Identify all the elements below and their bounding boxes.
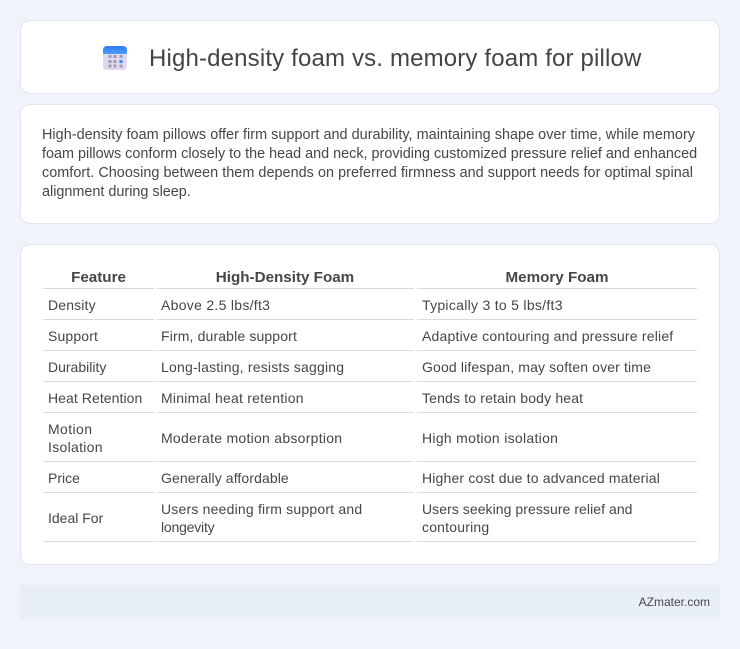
summary text: alignment during sleep. xyxy=(42,184,191,200)
summary text xyxy=(42,127,697,200)
table header: Feature xyxy=(71,269,126,286)
table header xyxy=(71,269,608,286)
table rows: Tends to retain body heat xyxy=(422,390,583,406)
table rows: Ideal For xyxy=(48,510,103,526)
footer bar xyxy=(20,585,720,619)
table rows: Moderate motion absorption xyxy=(161,430,342,446)
table rows: Motion xyxy=(48,421,92,437)
table rows: High motion isolation xyxy=(422,430,558,446)
title: High-density foam vs. memory foam for pillow xyxy=(149,45,642,72)
table rows: Typically 3 to 5 lbs/ft3 xyxy=(422,297,563,313)
table rows: Minimal heat retention xyxy=(161,390,304,406)
footer credit: AZmater.com xyxy=(639,595,710,609)
summary text: foam pillows conform closely to the head and neck, providing customized pressure relief and enhanced xyxy=(42,146,697,162)
table rows: Heat Retention xyxy=(48,390,142,406)
table rows: Users seeking pressure relief and xyxy=(422,501,633,517)
table rows: Users needing firm support and xyxy=(161,501,362,517)
icon: calendar xyxy=(103,46,127,70)
panel: comparison table xyxy=(20,244,720,565)
table rows: Firm, durable support xyxy=(161,328,297,344)
table rows: Generally affordable xyxy=(161,470,289,486)
table rows: Density xyxy=(48,297,96,313)
table header: Memory Foam xyxy=(506,269,608,286)
summary text: High-density foam pillows offer firm support and durability, maintaining shape over time, while memory xyxy=(42,127,695,143)
table rows: Higher cost due to advanced material xyxy=(422,470,660,486)
title card xyxy=(20,20,720,94)
table rows: Price xyxy=(48,470,80,486)
panel: summary xyxy=(20,104,720,224)
table header: High-Density Foam xyxy=(216,269,354,286)
table rows: Long-lasting, resists sagging xyxy=(161,359,344,375)
summary text: comfort. Choosing between them depends on preferred firmness and support needs for optimal spinal xyxy=(42,165,693,181)
table rows: Support xyxy=(48,328,98,344)
table rows: Durability xyxy=(48,359,106,375)
table rows: longevity xyxy=(161,519,214,535)
table rows: contouring xyxy=(422,519,489,535)
table rows: Above 2.5 lbs/ft3 xyxy=(161,297,270,313)
table rows: Good lifespan, may soften over time xyxy=(422,359,651,375)
table rows: Adaptive contouring and pressure relief xyxy=(422,328,673,344)
table rows: Isolation xyxy=(48,439,103,455)
